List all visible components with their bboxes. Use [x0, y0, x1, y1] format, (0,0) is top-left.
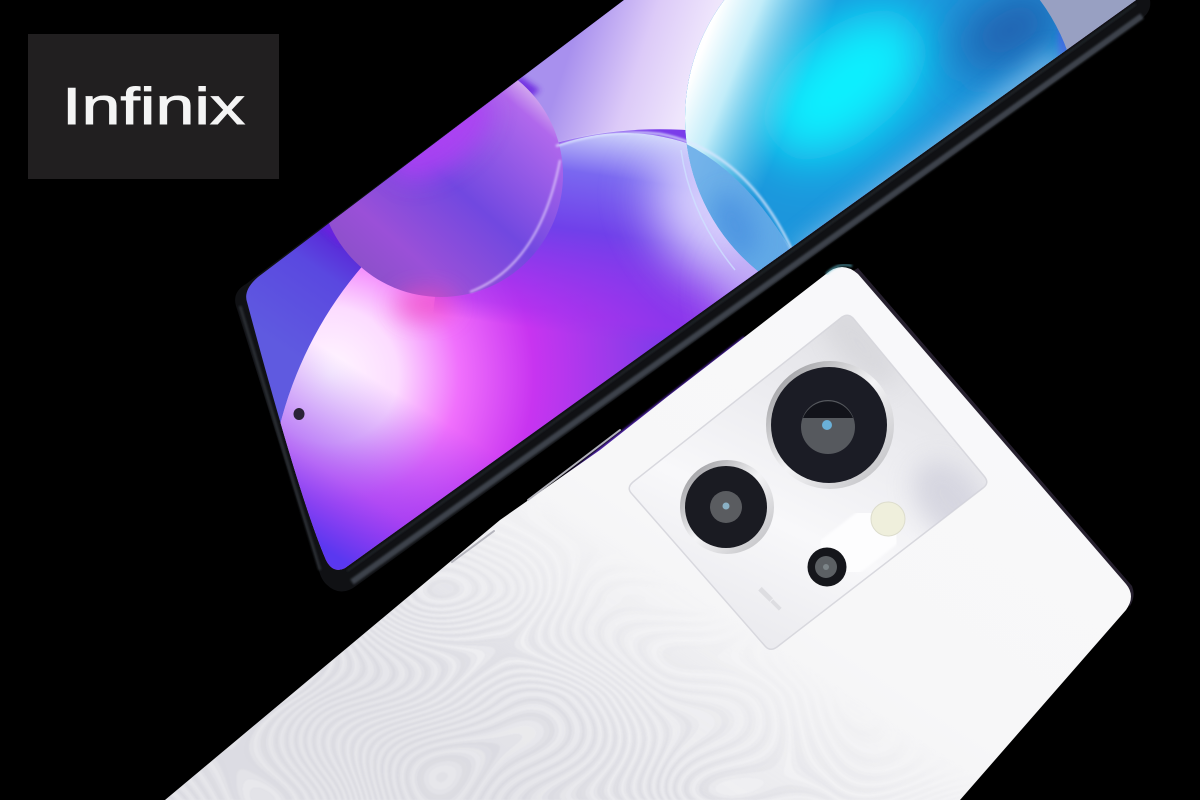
lavender backdrop: [500, 0, 1200, 260]
dark right edge: [848, 268, 1134, 606]
glass sphere rim highlight: [556, 132, 792, 250]
bright cyan core: [737, 0, 953, 188]
secondary lens: [680, 460, 774, 554]
screen wallpaper: [246, 0, 1136, 570]
cyan sphere lower edge: [681, 150, 735, 270]
sphere pink tip: [531, 58, 545, 82]
back phone: [165, 264, 1134, 800]
front phone with curved screen: [235, 0, 1150, 592]
magenta glow sphere: [280, 129, 870, 570]
top corner glint: [826, 265, 852, 274]
screen purple edge band: [320, 76, 540, 245]
sphere top violet: [390, 99, 497, 188]
module plate: [629, 315, 987, 649]
module small print: [758, 587, 782, 611]
depth lens: [808, 548, 846, 586]
logo plate: [28, 34, 279, 179]
pink seam under sphere: [395, 289, 455, 321]
front camera punch hole: [294, 408, 304, 420]
dark blue shade: [943, 0, 1077, 86]
camera module: [629, 293, 1002, 649]
side rim reflection: [470, 338, 745, 556]
purple sphere rim: [470, 160, 560, 292]
flash: [871, 502, 905, 536]
wavy back texture: [168, 549, 852, 800]
logo wordmark: Infinix: [62, 78, 245, 136]
side buttons: [452, 430, 620, 562]
frame bevel lines: [240, 4, 1142, 582]
pale lower streak: [800, 60, 1060, 260]
module shading: [833, 318, 981, 528]
glass overlap lens: [686, 144, 790, 272]
right blue rim: [1056, 28, 1067, 56]
logo: [28, 34, 279, 179]
phone body frame: [235, 0, 1150, 592]
purple sphere: [329, 80, 563, 297]
back panel: [165, 267, 1131, 800]
main lens: [766, 361, 894, 489]
glass pale highlight: [622, 140, 767, 311]
cyan sphere: [960, 0, 1136, 126]
flash to lens white strip: [827, 518, 890, 567]
glass sphere: [434, 133, 798, 338]
